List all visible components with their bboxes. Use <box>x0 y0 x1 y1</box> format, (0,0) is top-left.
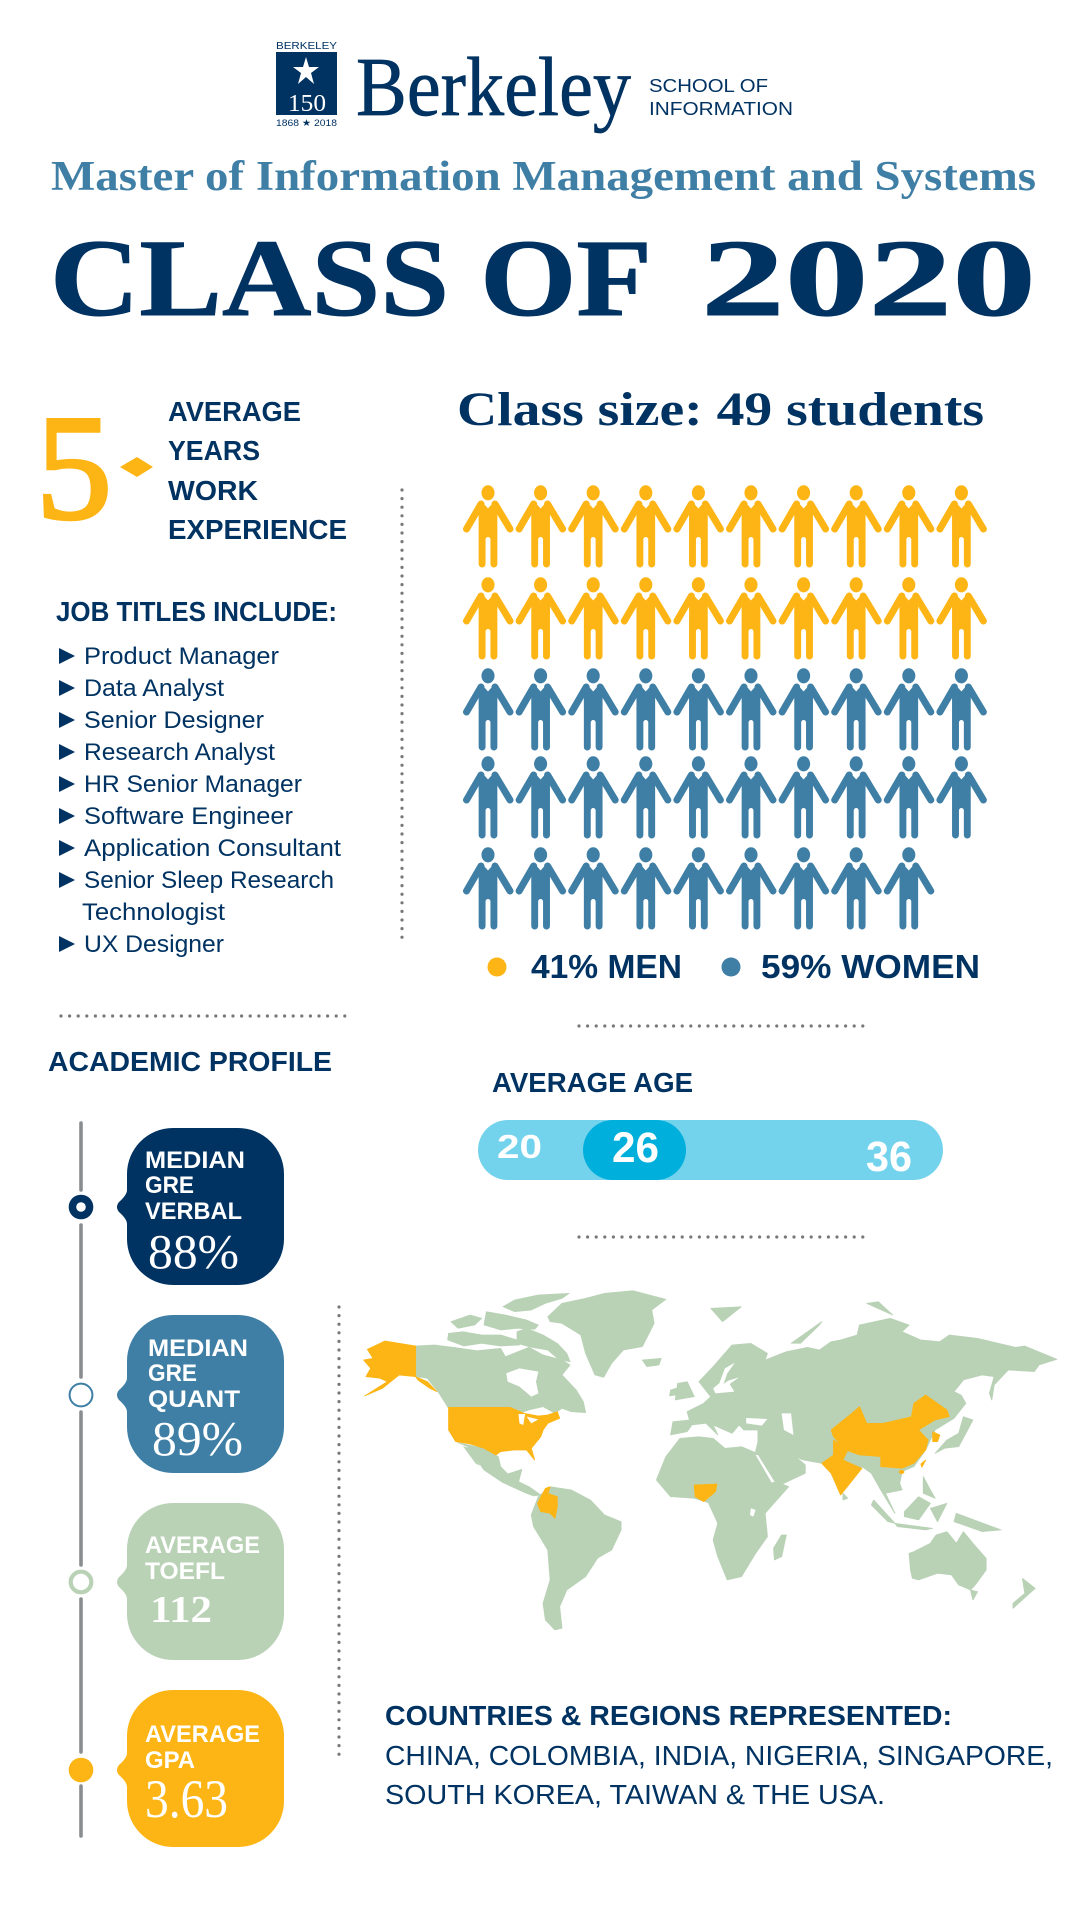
stat label: WORK <box>168 475 258 506</box>
job titles list: Senior Sleep Research <box>84 867 334 894</box>
average age heading: AVERAGE AGE <box>492 1067 693 1098</box>
academic profile heading: ACADEMIC PROFILE <box>48 1046 332 1077</box>
marker: GPA <box>69 1758 93 1782</box>
subtitle: Master of Information Management and Systems <box>51 154 1036 200</box>
logo: school name <box>649 75 793 119</box>
bubble: median GRE verbal: GRE <box>145 1172 194 1199</box>
stat label: EXPERIENCE <box>168 514 347 545</box>
countries and regions text: CHINA, COLOMBIA, INDIA, NIGERIA, SINGAPORE, <box>385 1740 1053 1771</box>
marker: GRE verbal <box>69 1195 93 1219</box>
logo: 150 badge: 1868 ★ 2018 <box>276 118 337 129</box>
average age range bar: 36 <box>866 1133 912 1181</box>
pictogram: 49 students <box>466 486 983 929</box>
legend: men and women: 41% MEN <box>531 948 682 985</box>
stat label <box>168 396 347 545</box>
men row 2 <box>466 578 983 659</box>
job titles panel <box>56 596 341 958</box>
job titles list: Research Analyst <box>84 739 275 766</box>
bubble: median GRE verbal: 88% <box>148 1224 239 1279</box>
class size heading: Class size: 49 students <box>457 383 984 436</box>
countries and regions text: SOUTH KOREA, TAIWAN & THE USA. <box>385 1779 885 1810</box>
big number 5: 5 <box>36 385 112 551</box>
logo: Berkeley School of Information <box>276 40 793 134</box>
logo wordmark: Berkeley <box>356 41 631 134</box>
bubble: median GRE quant: 89% <box>152 1411 243 1466</box>
bubble: median GRE quant: GRE <box>148 1360 197 1387</box>
countries and regions text: COUNTRIES & REGIONS REPRESENTED: <box>385 1700 952 1731</box>
bubble: average TOEFL <box>117 1503 284 1660</box>
bubble: median GRE quant: QUANT <box>148 1386 240 1413</box>
bubble: average TOEFL: AVERAGE <box>145 1532 260 1559</box>
bubble: median GRE quant <box>117 1315 284 1473</box>
bubble: average GPA <box>117 1690 284 1847</box>
map: land <box>416 1291 1057 1630</box>
bubble: average GPA: AVERAGE <box>145 1721 260 1748</box>
job titles list: Product Manager <box>84 643 279 670</box>
map: water cutouts <box>506 1363 793 1517</box>
bubble: average GPA: GPA <box>145 1747 195 1774</box>
title <box>50 217 1036 339</box>
logo: 150 badge <box>276 40 337 129</box>
title: 2020 <box>701 217 1036 339</box>
job titles list: Application Consultant <box>84 835 341 862</box>
bubble: median GRE quant: MEDIAN <box>148 1335 248 1362</box>
bubble: average GPA: 3.63 <box>145 1769 228 1829</box>
bubble: median GRE verbal: MEDIAN <box>145 1147 245 1174</box>
world map <box>364 1291 1057 1630</box>
list bullets <box>59 648 75 952</box>
women row 4 <box>466 757 983 838</box>
job titles heading: JOB TITLES INCLUDE: <box>56 596 337 627</box>
job titles list: Software Engineer <box>84 803 293 830</box>
legend: men and women: 59% WOMEN <box>761 948 980 985</box>
countries and regions text <box>385 1700 1053 1810</box>
bubble: average TOEFL: TOEFL <box>145 1558 225 1585</box>
marker: GRE quant <box>70 1384 92 1406</box>
average age range bar: 20 <box>497 1128 542 1165</box>
average age range bar: 26 <box>612 1124 659 1172</box>
logo: 150 badge: BERKELEY <box>276 40 337 52</box>
average age range bar <box>478 1120 943 1181</box>
logo: 150 badge: 150 <box>288 91 326 117</box>
job titles list: Senior Designer <box>84 707 264 734</box>
legend: men and women <box>488 948 980 985</box>
logo: school name: SCHOOL OF <box>649 75 768 96</box>
logo: school name: INFORMATION <box>649 98 793 119</box>
women row 5 <box>466 848 931 929</box>
stat: average years of work experience <box>36 385 347 551</box>
job titles list: UX Designer <box>84 931 224 958</box>
stat label: AVERAGE <box>168 396 301 427</box>
job titles list: Data Analyst <box>84 675 224 702</box>
bubble: median GRE verbal: VERBAL <box>145 1198 242 1225</box>
women row 3 <box>466 669 983 750</box>
bubble: median GRE verbal <box>117 1128 284 1285</box>
title: CLASS OF <box>50 217 652 339</box>
stat label: YEARS <box>168 435 260 466</box>
job titles list: Technologist <box>82 899 225 926</box>
map: highlighted countries <box>364 1341 949 1518</box>
diamond marker <box>120 457 153 477</box>
map: great lakes <box>519 1414 538 1425</box>
bubble: average TOEFL: 112 <box>150 1589 212 1631</box>
academic profile timeline <box>69 1123 93 1836</box>
job titles list: HR Senior Manager <box>84 771 302 798</box>
men row 1 <box>466 486 983 567</box>
job titles list <box>82 643 341 958</box>
marker: TOEFL <box>71 1572 91 1592</box>
